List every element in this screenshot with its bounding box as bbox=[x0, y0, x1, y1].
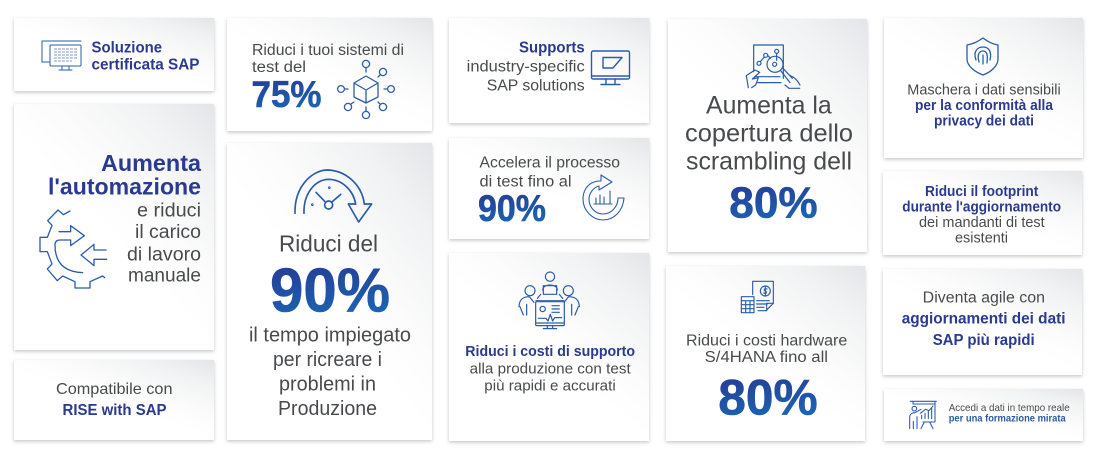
text: reduce manual workload: manuale bbox=[128, 266, 201, 287]
heading: increase automation bbox=[48, 150, 202, 199]
icon: monitor with code bbox=[42, 41, 81, 70]
icon: shield with fingerprint bbox=[967, 38, 998, 75]
text: mask sensitive data: per la conformità alla bbox=[915, 98, 1054, 114]
heading: certified SAP solution: certificata SAP bbox=[92, 57, 200, 74]
text: reduce footprint: dei mandanti di test bbox=[919, 215, 1045, 231]
text: reduce support costs: più rapidi e accurati bbox=[484, 378, 616, 395]
panel: increase automation bbox=[14, 104, 214, 350]
text: time spent recreating problems: per ricreare i bbox=[273, 348, 382, 371]
text: time spent recreating problems bbox=[249, 324, 411, 420]
panel: hardware costs bbox=[666, 266, 865, 441]
text: reduce test systems: test del bbox=[252, 59, 306, 76]
text: reduce footprint: Riduci il footprint bbox=[925, 184, 1038, 200]
text: accelerate testing: Accelera il processo bbox=[480, 155, 620, 172]
heading: certified SAP solution: Soluzione bbox=[92, 40, 162, 56]
icon: invoice and calculator bbox=[741, 281, 773, 313]
text: reduce hardware costs: S/4HANA fino all bbox=[705, 349, 828, 366]
panel: RISE with SAP bbox=[14, 360, 214, 440]
icon: circular arrow with chart bbox=[583, 175, 624, 220]
panel: reduce test systems bbox=[227, 18, 432, 131]
text: compatible with RISE bbox=[56, 381, 172, 419]
text: mask sensitive data: Maschera i dati sensibili bbox=[907, 82, 1061, 98]
text: supports industry solutions: Supports bbox=[519, 40, 585, 57]
text: reduce footprint: durante l'aggiornamento bbox=[902, 200, 1061, 216]
text: become agile bbox=[902, 290, 1066, 349]
heading: increase automation: Aumenta bbox=[101, 150, 202, 176]
panel: reduce support costs bbox=[449, 253, 649, 441]
text: mask sensitive data: privacy dei dati bbox=[934, 114, 1034, 130]
text: reduce manual workload: di lavoro bbox=[127, 245, 201, 266]
icon: clock with arrow bbox=[295, 170, 372, 222]
panel: accelerate testing bbox=[449, 138, 649, 239]
number: 80%: 80% bbox=[729, 179, 818, 228]
text: reduce manual workload: e riduci bbox=[137, 201, 201, 222]
text: become agile: Diventa agile con bbox=[923, 290, 1045, 307]
icon: hands, tablet and magnifier bbox=[746, 45, 800, 88]
text: reduce footprint bbox=[902, 184, 1061, 246]
icon: presenter with chart bbox=[910, 401, 936, 429]
text: reduce support costs: Riduci i costi di supporto bbox=[465, 343, 635, 360]
text: time spent recreating problems: il tempo impiegato bbox=[249, 324, 411, 347]
text: reduce by: Riduci del bbox=[279, 231, 378, 257]
text: compatible with RISE: Compatibile con bbox=[56, 381, 172, 398]
panel: real-time data access bbox=[884, 389, 1083, 441]
icon: team around monitor bbox=[519, 272, 579, 329]
icon: gear with arrows bbox=[40, 210, 107, 288]
number: 80%: 80% bbox=[718, 369, 818, 425]
text: access real-time data: Accedi a dati in tempo reale bbox=[949, 402, 1070, 414]
text: reduce test systems bbox=[252, 42, 404, 76]
panel: scrambling coverage bbox=[668, 19, 867, 252]
text: reduce manual workload: il carico bbox=[135, 222, 201, 243]
text: increase scrambling coverage: Aumenta la bbox=[706, 91, 832, 119]
text: access real-time data: per una formazione mirata bbox=[949, 412, 1066, 424]
text: reduce test systems: Riduci i tuoi sistemi di bbox=[252, 42, 404, 59]
text: reduce manual workload bbox=[127, 201, 201, 287]
text: mask sensitive data bbox=[907, 82, 1061, 130]
text: compatible with RISE: RISE with SAP bbox=[62, 402, 167, 419]
text: time spent recreating problems: problemi in bbox=[279, 373, 376, 396]
text: reduce hardware costs: Riduci i costi hardware bbox=[686, 332, 847, 349]
panel: mask sensitive data bbox=[884, 18, 1083, 158]
icon: cube network bbox=[338, 60, 394, 119]
text: reduce footprint: esistenti bbox=[955, 230, 1008, 246]
number: 90%: 90% bbox=[478, 188, 546, 229]
panel: reduce footprint bbox=[883, 171, 1082, 255]
text: reduce support costs: alla produzione con test bbox=[470, 360, 632, 377]
number: 75%: 75% bbox=[252, 74, 322, 115]
text: increase scrambling coverage bbox=[685, 91, 853, 175]
text: supports industry solutions: SAP solutions bbox=[487, 78, 585, 95]
text: access real-time data bbox=[949, 402, 1070, 424]
panel: industry-specific solutions bbox=[449, 18, 649, 123]
heading: increase automation: l'automazione bbox=[48, 173, 201, 199]
text: increase scrambling coverage: scrambling dell bbox=[686, 147, 852, 175]
text: reduce hardware costs bbox=[686, 332, 847, 366]
panel: become agile bbox=[883, 269, 1082, 375]
text: reduce support costs bbox=[465, 343, 635, 395]
text: supports industry solutions: industry-specific bbox=[467, 59, 585, 76]
text: time spent recreating problems: Produzione bbox=[278, 397, 377, 420]
text: supports industry solutions bbox=[467, 40, 585, 95]
text: accelerate testing bbox=[480, 155, 620, 191]
panel: reduce time by 90% bbox=[227, 143, 432, 440]
text: become agile: aggiornamenti dei dati bbox=[902, 310, 1066, 327]
heading: certified SAP solution bbox=[92, 40, 200, 74]
panel: certified SAP solution bbox=[14, 18, 214, 91]
icon: monitor bbox=[592, 51, 630, 84]
text: increase scrambling coverage: copertura dello bbox=[685, 120, 853, 148]
text: accelerate testing: di test fino al bbox=[480, 174, 572, 191]
text: become agile: SAP più rapidi bbox=[933, 332, 1035, 349]
number: 90%: 90% bbox=[270, 257, 390, 326]
